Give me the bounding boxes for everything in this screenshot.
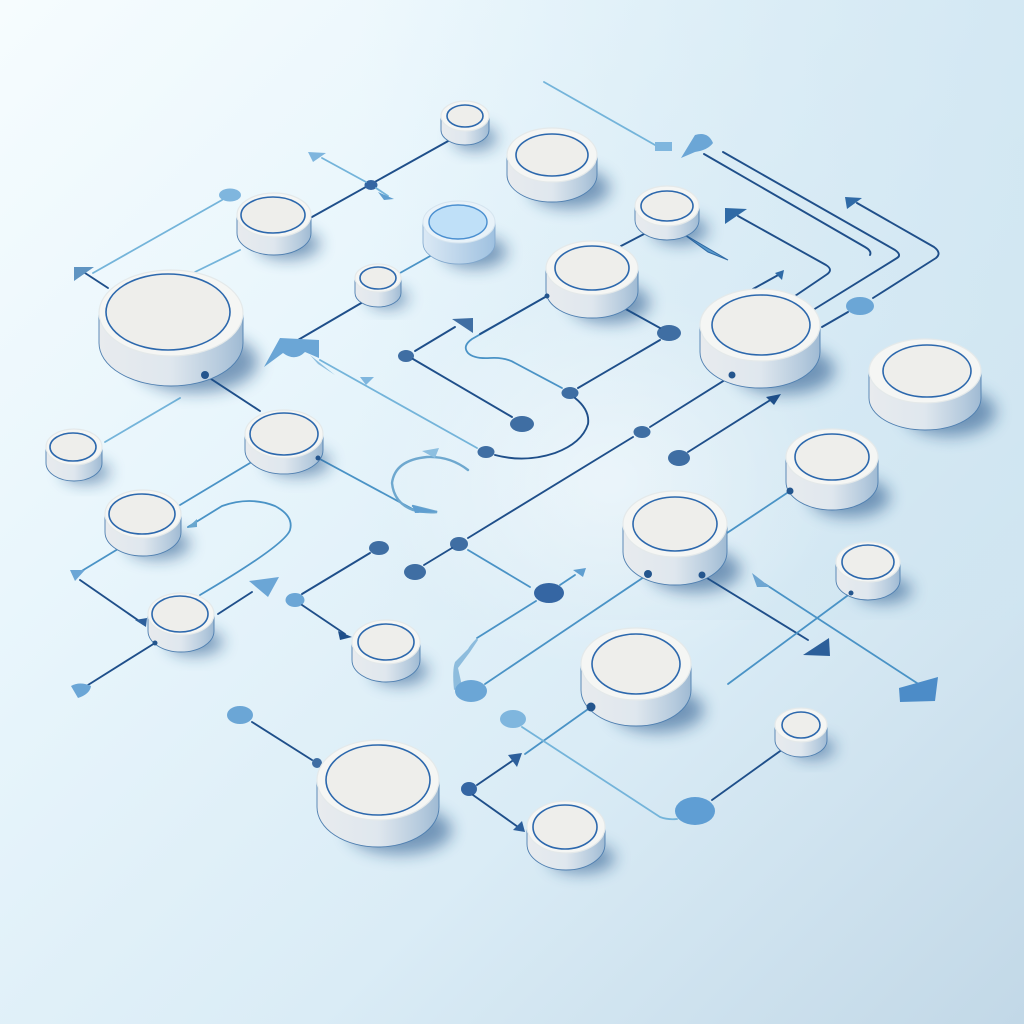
node 18	[352, 620, 428, 685]
node 15	[623, 491, 741, 592]
node 20	[775, 708, 835, 759]
connectors: upper right routed lines	[544, 82, 939, 327]
node 9	[700, 289, 835, 394]
node 12	[46, 429, 110, 483]
connectors: center lower lines	[453, 491, 938, 702]
node 7	[546, 241, 650, 323]
connector: long diagonal line	[404, 373, 781, 580]
node 11	[245, 410, 330, 476]
connectors: left side lines and curved arrow	[70, 448, 468, 698]
node 14	[786, 429, 890, 517]
node attachment dots	[152, 294, 854, 712]
node 6	[355, 264, 408, 308]
connectors: top left lines	[74, 140, 646, 448]
node 16	[836, 542, 912, 603]
node 1	[441, 101, 497, 150]
node 21	[317, 740, 452, 854]
node 10	[869, 339, 996, 436]
node 2	[507, 128, 610, 208]
node 19	[581, 628, 704, 732]
node 22	[527, 801, 615, 873]
connectors: bottom lines	[227, 706, 783, 832]
node 13	[105, 490, 190, 559]
node 17	[148, 593, 223, 655]
node 3	[237, 193, 320, 259]
node 4: highlighted blue	[423, 201, 507, 268]
node 5	[635, 186, 708, 244]
connectors: central S-curve and arc	[398, 296, 681, 459]
node 8: largest	[99, 270, 258, 392]
